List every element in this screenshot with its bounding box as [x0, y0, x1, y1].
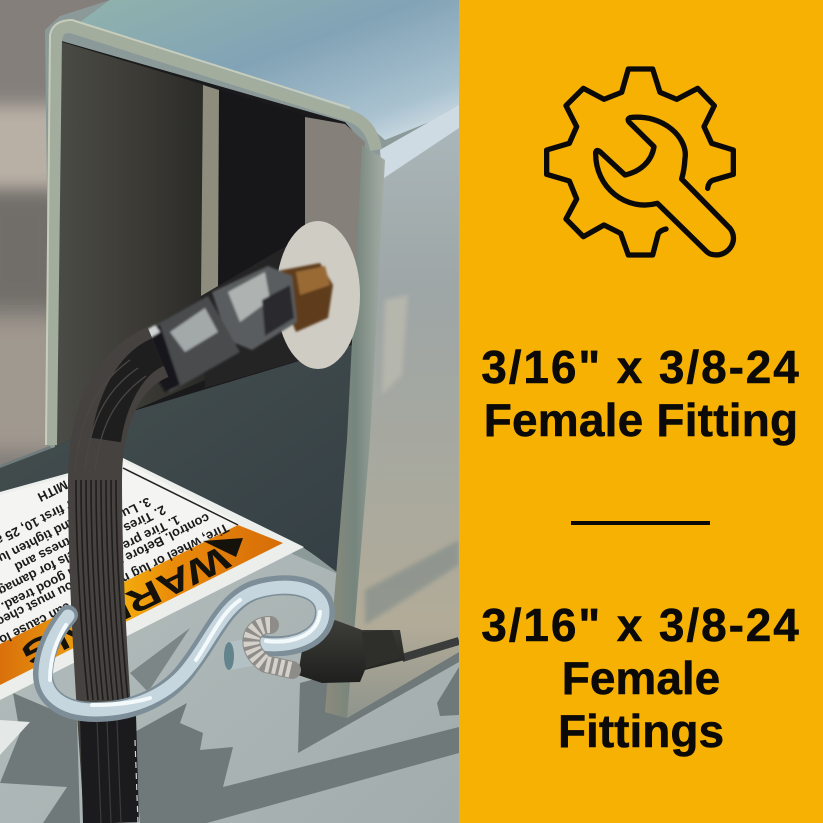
cable and ferrule [298, 620, 459, 683]
box tube: cut rim [46, 20, 385, 718]
box tube: top face [80, 0, 459, 140]
panel: yellow specs [459, 0, 823, 823]
hose [75, 352, 158, 823]
washer [276, 221, 360, 369]
wire rope loop [251, 625, 292, 670]
box tube: right face [347, 105, 459, 718]
cast shadows on plate [0, 640, 459, 823]
icon: gear and wrench [544, 66, 736, 258]
warning body text: 3. Lug nut tightness and [12, 494, 153, 575]
heading: fitting one: Female Fitting [484, 394, 798, 446]
heading: fitting one [481, 341, 801, 446]
brass nut [272, 263, 333, 332]
crimp sleeve [133, 296, 240, 392]
lower galvanized plate [0, 425, 459, 823]
steel hex [212, 266, 297, 350]
s-hook [43, 585, 325, 712]
hose fitting [133, 263, 333, 392]
warning band [0, 525, 283, 685]
divider [571, 521, 710, 525]
interior floor [0, 345, 352, 580]
heading: fitting two: Fittings [558, 705, 724, 757]
heading: fitting two: Female [562, 652, 720, 704]
box tube: body base [45, 0, 459, 718]
warning body text: 1. Tire pressure and good tread. [0, 512, 182, 614]
background: pavement [0, 0, 120, 520]
steel pin [224, 638, 258, 670]
warning heading: WARNING [15, 538, 235, 674]
heading: fitting two [481, 599, 801, 757]
interior left wall [55, 42, 205, 447]
warning body text: MITH [35, 477, 70, 505]
warning label [0, 458, 304, 700]
heading: fitting one: 3/16" x 3/8-24 [481, 341, 801, 393]
box tube: interior [0, 40, 365, 580]
interior back [219, 90, 305, 290]
interior right wall [305, 117, 365, 300]
panel: product photo [0, 0, 459, 823]
warning triangle icon [203, 538, 243, 557]
interior divider [201, 85, 219, 296]
heading: fitting two: 3/16" x 3/8-24 [481, 599, 801, 651]
